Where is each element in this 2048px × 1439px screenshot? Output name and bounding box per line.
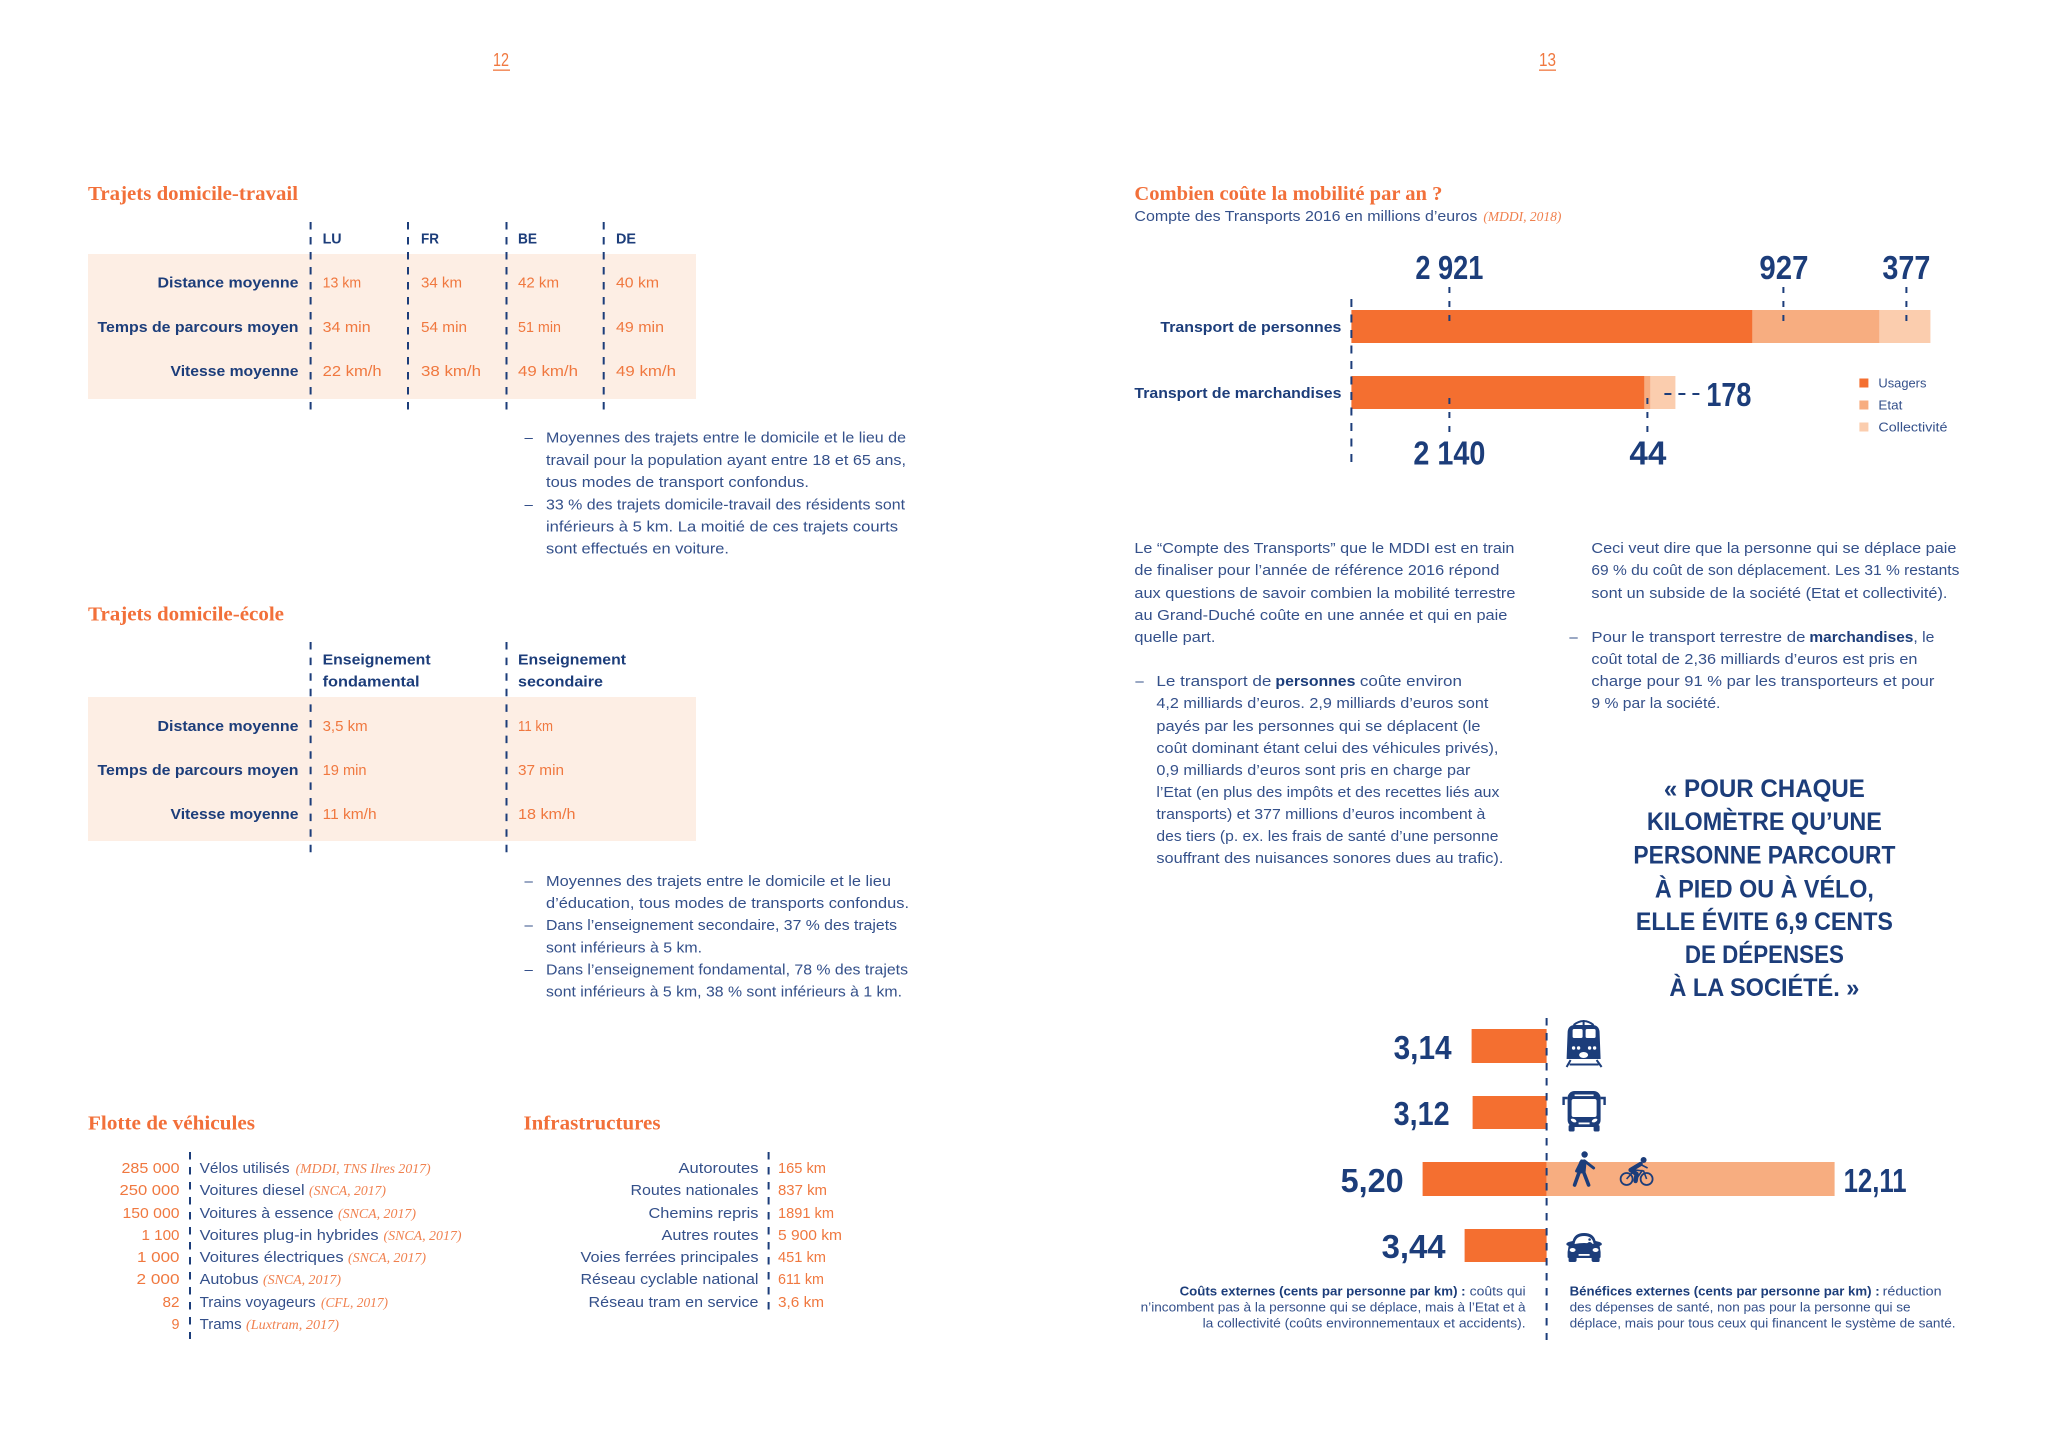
infrastructure labels: Réseau tram en service — [588, 1294, 758, 1311]
values: 37 min — [518, 763, 564, 779]
text block: left column: transports) et 377 millions d’euros incombent à — [1156, 806, 1486, 823]
quantities: 2 000 — [136, 1272, 180, 1288]
column headers: fondamental — [323, 674, 420, 690]
notes: sont effectués en voiture. — [546, 540, 729, 558]
infrastructure values: 611 km — [778, 1272, 824, 1288]
vehicle labels: Voitures plug-in hybrides — [200, 1227, 379, 1244]
column headers — [323, 230, 636, 248]
values: 18 km/h — [518, 807, 576, 823]
values: 38 km/h — [421, 364, 481, 380]
text block: right column: Pour le transport terrestre de — [1591, 629, 1805, 646]
legend — [1859, 376, 1947, 434]
vehicle labels: Vélos utilisés — [200, 1160, 290, 1177]
separator — [768, 1152, 770, 1317]
column separators — [311, 642, 506, 858]
legend: Usagers — [1878, 376, 1926, 390]
quote: À LA SOCIÉTÉ. » — [1669, 973, 1859, 1002]
column separators — [311, 222, 604, 410]
chart leader lines — [1351, 287, 1906, 466]
diverging bar chart: external costs and benefits — [1141, 1018, 1956, 1340]
table background — [88, 697, 696, 841]
caption: bénéfices externes — [1570, 1284, 1956, 1330]
bar labels: Transport de personnes — [1160, 319, 1341, 336]
row labels: Distance moyenne — [158, 274, 298, 292]
text block: right column: 69 % du coût de son déplacement. Les 31 % restants — [1591, 562, 1959, 579]
row labels: Distance moyenne — [158, 718, 298, 735]
bar: transport de marchandises — [1351, 376, 1675, 409]
column headers: LU — [323, 230, 342, 248]
quote: PERSONNE PARCOURT — [1633, 842, 1895, 870]
values: 49 km/h — [518, 364, 578, 380]
quantities: 1 000 — [137, 1250, 180, 1266]
notes: Moyennes des trajets entre le domicile et le lieu — [546, 873, 891, 890]
bar values: 3,44 — [1382, 1228, 1446, 1265]
values: 11 km/h — [323, 807, 377, 823]
bar values: 2 140 — [1413, 434, 1485, 472]
values: 19 min — [323, 763, 367, 779]
infrastructure values: 451 km — [778, 1250, 826, 1266]
icon: cyclist — [1621, 1157, 1653, 1185]
values: 49 km/h — [616, 364, 676, 380]
row labels: Temps de parcours moyen — [98, 319, 298, 336]
bar values: 927 — [1759, 249, 1808, 286]
row labels: Vitesse moyenne — [170, 806, 298, 823]
text block: right column: – — [1569, 629, 1578, 646]
sources: (MDDI, TNS Ilres 2017) — [296, 1162, 431, 1177]
infrastructure values: 165 km — [778, 1161, 826, 1177]
bar values: 12,11 — [1844, 1162, 1907, 1199]
quantities: 285 000 — [122, 1161, 180, 1177]
panel: infrastructures — [524, 1112, 842, 1317]
bar values: 44 — [1629, 434, 1667, 472]
notes: Dans l’enseignement fondamental, 78 % des trajets — [546, 962, 908, 978]
bar labels: Transport de marchandises — [1134, 385, 1341, 402]
caption: bénéfices externes: Bénéfices externes (cents par personne par km) : — [1570, 1284, 1880, 1298]
values: 22 km/h — [323, 364, 382, 380]
icon: pedestrian — [1575, 1151, 1594, 1185]
stacked bar chart — [1134, 249, 1947, 472]
values: 34 km — [421, 276, 462, 292]
column headers: DE — [616, 230, 636, 248]
text block: left column: 4,2 milliards d’euros. 2,9 milliards d’euros sont — [1156, 695, 1489, 712]
notes: inférieurs à 5 km. La moitié de ces trajets courts — [546, 518, 898, 536]
row labels: Temps de parcours moyen — [98, 762, 298, 779]
legend: Etat — [1878, 398, 1903, 412]
heading: combien coûte la mobilité par an: Combien coûte la mobilité par an ? — [1134, 183, 1442, 205]
icon: car — [1566, 1233, 1602, 1262]
values: 40 km — [616, 276, 659, 292]
sources: (CFL, 2017) — [321, 1296, 388, 1311]
quote: DE DÉPENSES — [1685, 940, 1844, 969]
panel: flotte de véhicules — [88, 1112, 462, 1339]
icon: train — [1567, 1020, 1602, 1067]
quantities: 9 — [172, 1317, 180, 1333]
infrastructure labels: Chemins repris — [648, 1205, 758, 1222]
values: 54 min — [421, 320, 467, 336]
text block: right column: sont un subside de la société (Etat et collectivité). — [1591, 585, 1947, 602]
bar values: 3,14 — [1394, 1029, 1452, 1066]
infrastructure labels: Réseau cyclable national — [580, 1271, 758, 1288]
values: 51 min — [518, 320, 561, 336]
infrastructure labels: Autoroutes — [678, 1160, 758, 1177]
text block: left column: aux questions de savoir combien la mobilité terrestre — [1134, 585, 1515, 602]
text block: left column: coûte environ — [1360, 673, 1462, 690]
panel: trajets domicile-travail — [88, 183, 906, 558]
bar values: 2 921 — [1415, 249, 1483, 286]
vehicle labels: Voitures diesel — [200, 1182, 305, 1199]
notes: – — [524, 430, 534, 446]
infrastructure labels: Autres routes — [662, 1227, 758, 1244]
text block: left column: Le transport de — [1156, 673, 1271, 690]
text block: right column: charge pour 91 % par les transporteurs et pour — [1591, 673, 1934, 690]
text block: right column: Ceci veut dire que la personne qui se déplace paie — [1591, 540, 1956, 557]
bar values — [1413, 249, 1930, 472]
notes: Dans l’enseignement secondaire, 37 % des trajets — [546, 917, 897, 934]
vehicle labels: Voitures à essence — [200, 1205, 334, 1222]
panel: trajets domicile-école — [88, 604, 909, 1000]
text block: right column — [1569, 540, 1959, 712]
values: 11 km — [518, 719, 553, 735]
values: 42 km — [518, 276, 559, 292]
quote: KILOMÈTRE QU’UNE — [1647, 807, 1882, 836]
caption: coûts externes — [1141, 1284, 1526, 1330]
quantities: 1 100 — [142, 1228, 180, 1244]
caption: coûts externes: coûts qui — [1470, 1284, 1526, 1298]
vehicle labels: Autobus — [200, 1271, 259, 1288]
sources: (SNCA, 2017) — [338, 1207, 416, 1222]
text block: left column: personnes — [1275, 673, 1355, 690]
vehicle labels: Trams — [200, 1316, 242, 1333]
heading: trajets domicile-travail: Trajets domicile-travail — [88, 183, 298, 205]
column headers: FR — [421, 230, 439, 248]
bar: transport de personnes — [1351, 310, 1930, 343]
table background — [88, 254, 696, 399]
notes — [524, 873, 909, 1000]
quantities: 250 000 — [120, 1183, 180, 1199]
notes: Moyennes des trajets entre le domicile et le lieu de — [546, 430, 906, 446]
subtitle: (MDDI, 2018) — [1483, 210, 1562, 225]
column headers: BE — [518, 230, 537, 248]
sources: (SNCA, 2017) — [348, 1251, 426, 1266]
text block: left column: l’Etat (en plus des impôts et des recettes liés aux — [1156, 784, 1500, 801]
values — [323, 719, 576, 823]
caption: coûts externes: n’incombent pas à la personne qui se déplace, mais à l’Etat et à — [1141, 1300, 1526, 1314]
quantities: 82 — [162, 1295, 180, 1311]
text block: left column: – — [1135, 673, 1144, 690]
text block: left column: souffrant des nuisances sonores dues au trafic). — [1156, 850, 1503, 867]
quote: « POUR CHAQUE — [1664, 775, 1865, 803]
text block: left column: de finaliser pour l’année de référence 2016 répond — [1134, 562, 1499, 579]
central axis — [1546, 1018, 1548, 1340]
quantities — [120, 1161, 180, 1333]
values: 3,5 km — [323, 719, 368, 735]
infrastructure labels: Voies ferrées principales — [580, 1249, 758, 1266]
quote: ELLE ÉVITE 6,9 CENTS — [1636, 907, 1893, 936]
quantities: 150 000 — [122, 1206, 180, 1222]
text block: left column: des tiers (p. ex. les frais de santé d’une personne — [1156, 828, 1498, 845]
heading: infrastructures: Infrastructures — [524, 1112, 661, 1134]
caption: bénéfices externes: réduction — [1883, 1284, 1942, 1298]
infrastructure values — [778, 1161, 842, 1311]
notes: tous modes de transport confondus. — [546, 474, 809, 491]
values: 13 km — [323, 276, 361, 292]
column headers: secondaire — [518, 674, 603, 690]
heading: flotte de véhicules: Flotte de véhicules — [88, 1112, 255, 1134]
column headers: Enseignement — [518, 652, 626, 668]
vehicle labels — [200, 1160, 379, 1333]
infrastructure values: 5 900 km — [778, 1228, 842, 1244]
legend: Collectivité — [1878, 420, 1947, 434]
notes: d’éducation, tous modes de transports confondus. — [546, 895, 909, 912]
notes: – — [524, 873, 534, 890]
infrastructure values: 837 km — [778, 1183, 827, 1199]
row labels — [98, 718, 298, 823]
column headers — [323, 652, 626, 690]
notes: – — [524, 496, 534, 514]
notes: – — [524, 917, 534, 934]
subtitle: Compte des Transports 2016 en millions d’euros — [1134, 208, 1477, 225]
caption: bénéfices externes: déplace, mais pour tous ceux qui financent le système de santé. — [1570, 1316, 1956, 1330]
infrastructure labels: Routes nationales — [630, 1182, 758, 1199]
notes: sont inférieurs à 5 km. — [546, 940, 702, 956]
values: 49 min — [616, 320, 664, 336]
heading: trajets domicile-école: Trajets domicile-école — [88, 604, 284, 626]
sources: (Luxtram, 2017) — [246, 1318, 339, 1333]
text block: right column: coût total de 2,36 milliards d’euros est pris en — [1591, 651, 1917, 668]
vehicle labels: Voitures électriques — [200, 1249, 344, 1266]
bar values: 178 — [1706, 376, 1751, 413]
notes — [524, 430, 906, 558]
bar values: 5,20 — [1341, 1162, 1404, 1199]
values: 34 min — [323, 320, 371, 336]
row labels — [98, 274, 298, 380]
panel: combien coûte la mobilité — [1134, 183, 1947, 472]
page number 13: 13 — [1539, 50, 1556, 70]
text block: right column: marchandises — [1809, 629, 1913, 646]
column headers: Enseignement — [323, 652, 431, 668]
icon: bus — [1564, 1091, 1605, 1132]
caption: coûts externes: la collectivité (coûts environnementaux et accidents). — [1203, 1316, 1526, 1330]
page number 12: 12 — [493, 50, 509, 70]
notes: 33 % des trajets domicile-travail des résidents sont — [546, 496, 906, 514]
bar values — [1341, 1029, 1907, 1265]
text block: right column: 9 % par la société. — [1591, 695, 1720, 712]
sources — [246, 1162, 462, 1333]
quote — [1633, 775, 1895, 1002]
text block: left column: Le “Compte des Transports” que le MDDI est en train — [1134, 540, 1514, 557]
bar values: 3,12 — [1394, 1095, 1450, 1132]
sources: (SNCA, 2017) — [263, 1273, 341, 1288]
caption: bénéfices externes: des dépenses de santé, non pas pour la personne qui se — [1570, 1300, 1911, 1314]
vehicle labels: Trains voyageurs — [200, 1294, 316, 1311]
bar labels — [1134, 319, 1341, 402]
caption: coûts externes: Coûts externes (cents par personne par km) : — [1180, 1284, 1466, 1298]
row labels: Vitesse moyenne — [170, 363, 298, 380]
notes: travail pour la population ayant entre 18 et 65 ans, — [546, 452, 906, 469]
bar values: 377 — [1882, 249, 1930, 286]
text block: left column: coût dominant étant celui des véhicules privés), — [1156, 740, 1498, 757]
text block: right column: , le — [1913, 629, 1934, 646]
infrastructure values: 3,6 km — [778, 1295, 824, 1311]
text block: left column: payés par les personnes qui se déplacent (le — [1156, 718, 1480, 735]
values — [323, 276, 676, 380]
cost bars — [1423, 1029, 1547, 1262]
text block: left column: au Grand-Duché coûte en une année et qui en paie — [1134, 607, 1507, 624]
notes: – — [524, 962, 534, 978]
notes: sont inférieurs à 5 km, 38 % sont inférieurs à 1 km. — [546, 984, 902, 1000]
sources: (SNCA, 2017) — [384, 1229, 462, 1244]
benefit bar — [1547, 1162, 1835, 1196]
text block: left column: 0,9 milliards d’euros sont pris en charge par — [1156, 762, 1470, 779]
infrastructure values: 1891 km — [778, 1206, 834, 1222]
text block: left column: quelle part. — [1134, 629, 1215, 646]
quote: À PIED OU À VÉLO, — [1655, 874, 1874, 904]
sources: (SNCA, 2017) — [309, 1184, 386, 1199]
text block: left column — [1134, 540, 1515, 867]
infrastructure labels — [580, 1160, 758, 1311]
separator — [189, 1152, 191, 1339]
